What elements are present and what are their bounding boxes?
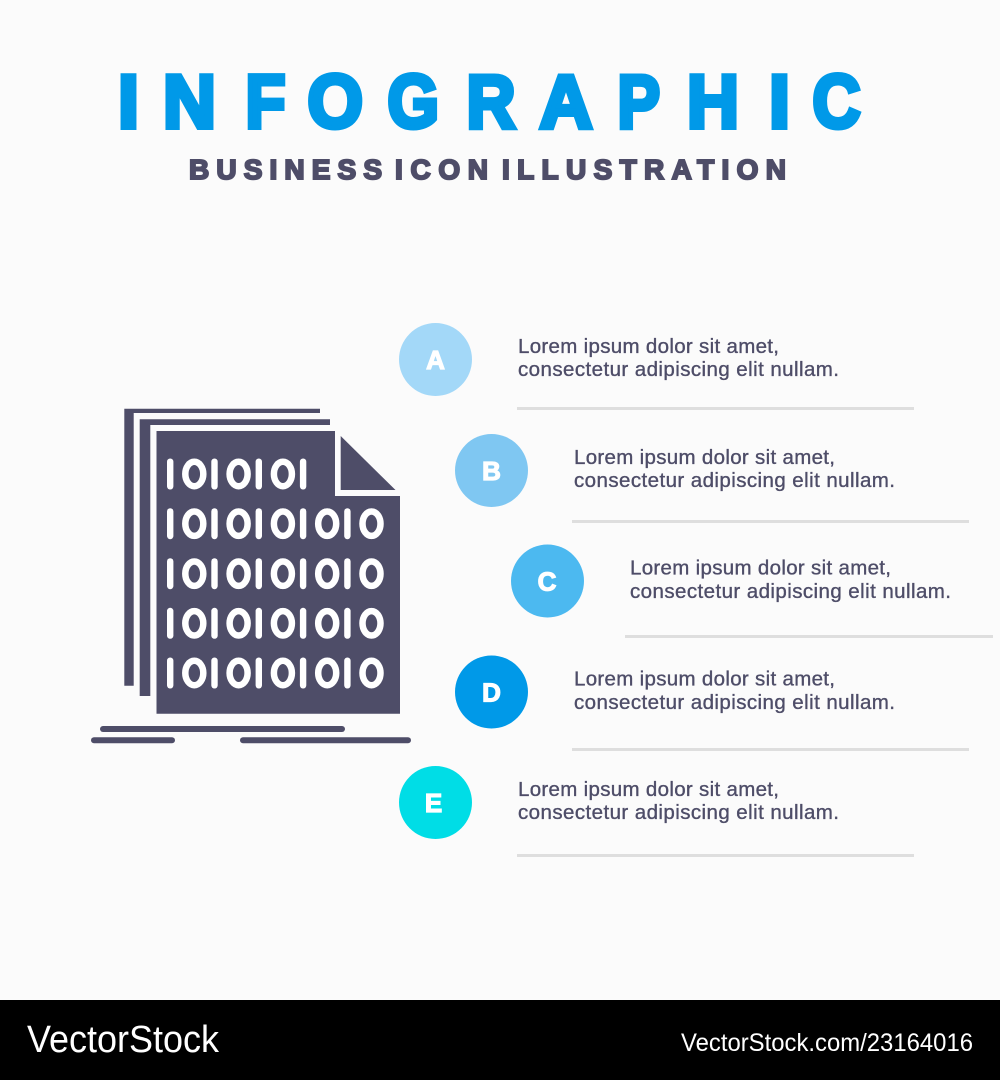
binary row 1 — [167, 458, 306, 490]
text A: Lorem ipsum dolor sit amet, — [518, 335, 779, 358]
text A — [518, 335, 839, 381]
title: I — [118, 60, 139, 144]
step C — [511, 544, 993, 638]
subtitle: ILLUSTRATION — [502, 154, 786, 185]
ground lines — [91, 726, 411, 743]
title: I — [769, 60, 790, 144]
binary row 2 — [167, 508, 380, 539]
text B: consectetur adipiscing elit nullam. — [574, 469, 895, 492]
text D: Lorem ipsum dolor sit amet, — [574, 668, 835, 690]
text C — [630, 556, 951, 603]
title: A — [540, 60, 592, 144]
step A — [399, 323, 914, 410]
title: G — [388, 60, 439, 144]
icon: binary file stack — [91, 409, 411, 743]
back page — [124, 409, 320, 686]
text A: consectetur adipiscing elit nullam. — [518, 358, 839, 381]
step E — [399, 766, 914, 857]
badge B — [455, 434, 528, 507]
binary row 4 — [167, 608, 380, 639]
title: O — [308, 60, 363, 144]
badge E: E — [425, 788, 442, 818]
subtitle — [189, 154, 786, 185]
title: N — [163, 60, 216, 144]
middle page — [140, 419, 330, 696]
text B — [574, 446, 895, 492]
text C: consectetur adipiscing elit nullam. — [630, 580, 951, 603]
text D: consectetur adipiscing elit nullam. — [574, 691, 895, 714]
title: H — [687, 60, 739, 144]
badge C — [511, 544, 584, 618]
footer url: VectorStock.com/23164016 — [681, 1029, 973, 1057]
text B: Lorem ipsum dolor sit amet, — [574, 446, 835, 469]
binary row 3 — [167, 558, 380, 589]
front page — [156, 431, 400, 714]
badge D — [455, 656, 528, 728]
text E: consectetur adipiscing elit nullam. — [518, 801, 839, 824]
title — [118, 60, 860, 144]
title: P — [618, 60, 660, 144]
text E — [518, 778, 839, 824]
title: R — [466, 60, 516, 144]
badge A — [399, 323, 472, 396]
title: C — [812, 60, 860, 144]
step B — [455, 434, 969, 523]
badge A: A — [426, 345, 445, 375]
badge D: D — [482, 678, 501, 708]
binary row 5 — [167, 658, 380, 688]
subtitle: ICON — [395, 154, 488, 185]
badge E — [399, 766, 472, 839]
footer bar — [0, 1000, 1000, 1080]
badge B: B — [482, 456, 501, 486]
text E: Lorem ipsum dolor sit amet, — [518, 778, 779, 801]
folded corner — [341, 436, 396, 490]
footer logo: VectorStock — [27, 1019, 220, 1061]
text D — [574, 668, 895, 714]
subtitle: BUSINESS — [189, 154, 382, 185]
badge C: C — [538, 566, 557, 596]
text C: Lorem ipsum dolor sit amet, — [630, 556, 891, 580]
step D — [455, 656, 969, 751]
title: F — [246, 60, 286, 144]
